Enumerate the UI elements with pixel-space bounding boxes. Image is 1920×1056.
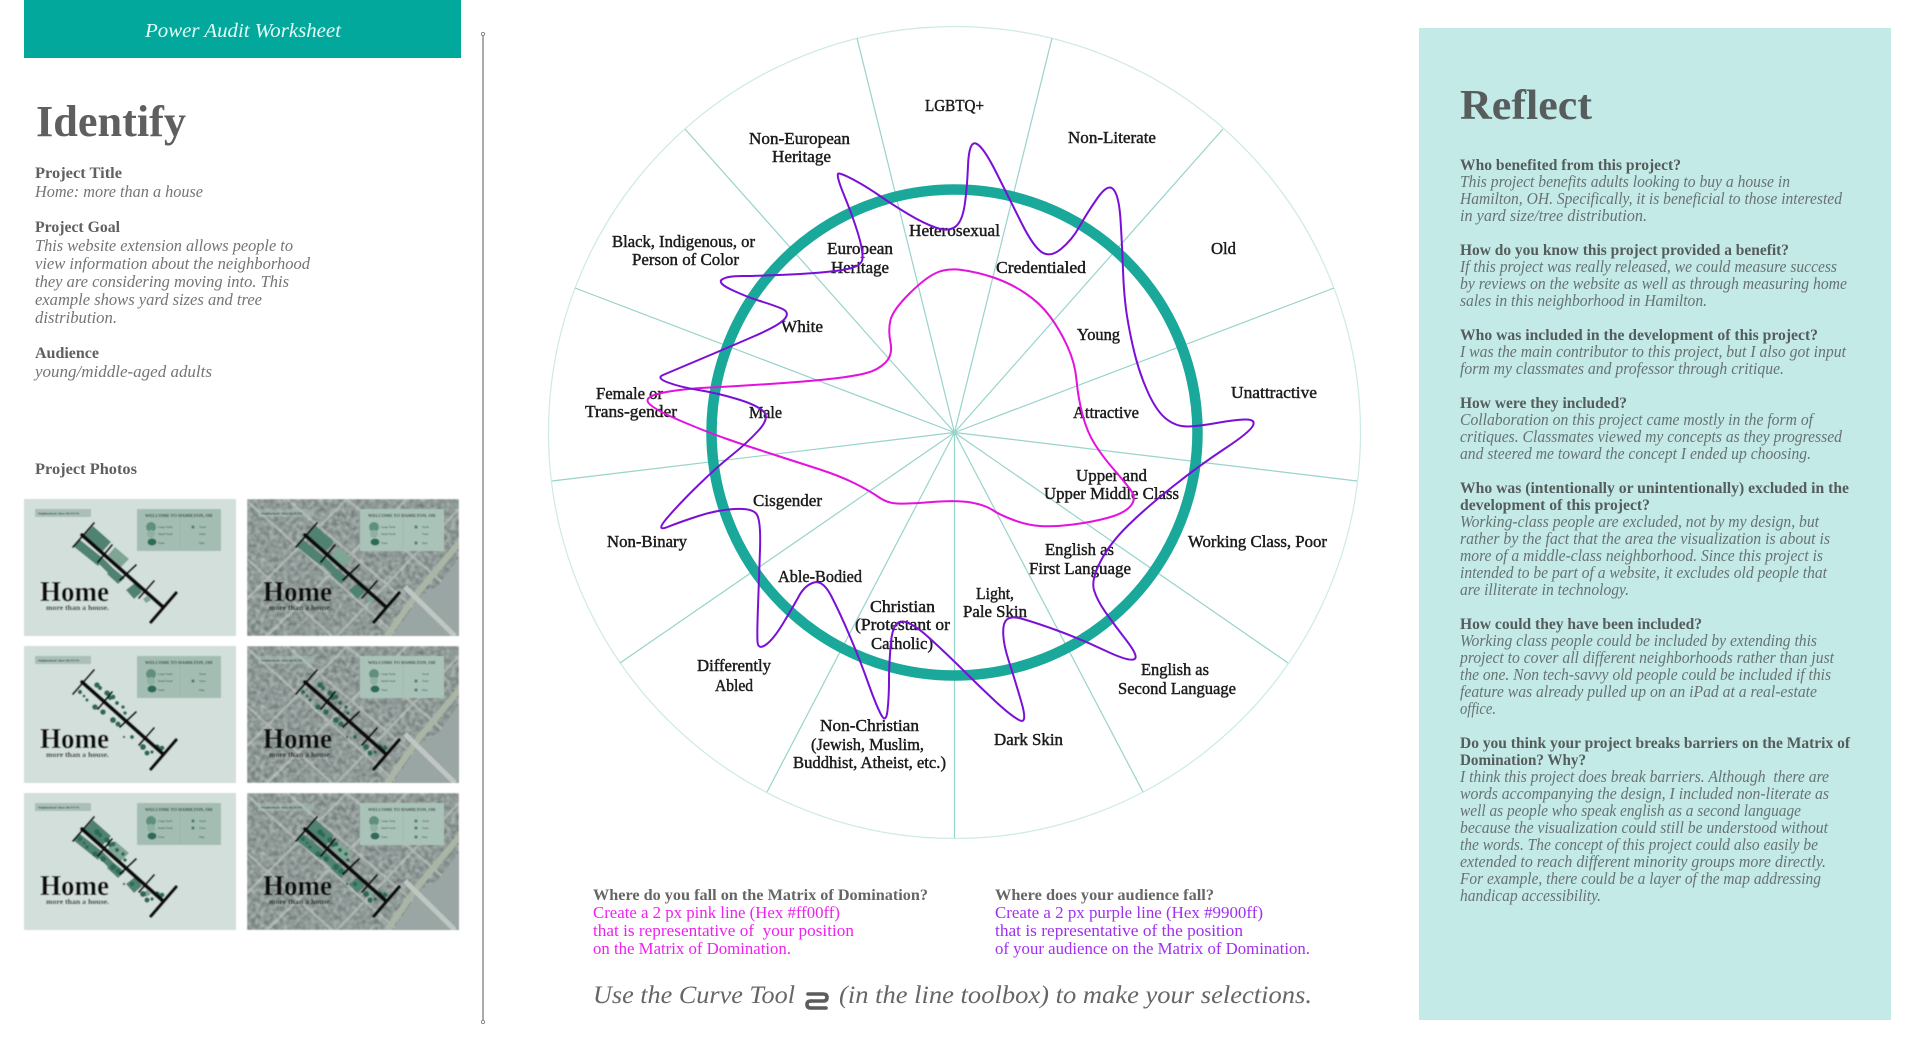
photo: yards and trees on aerial: Small Yards [381,826,396,830]
curve tool instruction [593,982,1312,1009]
photo: yards on aerial: Home [263,577,332,608]
vertical divider [481,32,485,1024]
photo: yards and trees on plain background: Neighborhood: Show Me H F Pt [38,806,79,810]
question: breaks barriers: because the visualization could still be understood without [1460,818,1828,837]
photo: yards on aerial: more than a house. [269,603,332,612]
curve: purple audience position [660,143,1254,721]
question: who was included [1459,327,1846,378]
photo: yards and trees on aerial: Neighborhood: Show Me H F Pt [261,806,302,810]
inner labels: Heritage [831,258,889,277]
photo: yards on aerial: Map [422,541,428,545]
question: who benefited: Who benefited from this project? [1460,157,1681,174]
photo: yards on plain background: Trees [158,541,165,545]
photo: trees on aerial: Yards [422,672,430,676]
question: who was excluded: Who was (intentionally or unintentionally) excluded in the [1460,480,1849,497]
photo: yards on plain background: Map [199,541,205,545]
question: how do you know: sales in this neighborhood in Hamilton. [1460,291,1707,310]
outer labels: Non-Binary [607,532,687,551]
inner labels: Heterosexual [909,221,1000,240]
photo: yards and trees on plain background: Trees [158,835,165,839]
photo: yards on aerial: Trees [381,541,388,545]
power threshold ring [712,190,1198,676]
header band: Power Audit Worksheet [144,20,341,42]
inner labels: Male [749,403,782,422]
photo: trees on plain background: Neighborhood: Show Me H F Pt [38,658,79,662]
question: breaks barriers: Domination? Why? [1460,752,1586,769]
question: how do you know: by reviews on the website as well as through measuring home [1460,274,1847,293]
photo: trees on plain background: Large Yards [158,672,173,676]
text block: project goal: view information about the neighborhood [35,254,311,273]
photo: yards on aerial: Neighborhood: Show Me H F Pt [261,512,302,516]
outer labels: Trans-gender [585,402,677,421]
text block: project goal [35,219,311,327]
curve tool instruction: (in the line toolbox) to make your selections. [839,982,1312,1009]
photo: yards and trees on aerial: WELCOME TO HAMILTON, OH [368,807,436,812]
photo: yards on plain background: Large Yards [158,525,173,529]
outer labels: Black, Indigenous, or [612,232,755,251]
inner labels: Young [1077,325,1120,344]
text block: audience [33,345,212,381]
text block: audience: young/middle-aged adults [33,362,212,381]
question: how could they have been included [1459,616,1834,718]
question: how could they have been included: Working class people could be included by extending this [1460,631,1817,650]
outer labels: Heritage [772,147,831,166]
outer labels: LGBTQ+ [925,96,984,115]
question: who was excluded: are illiterate in technology. [1460,580,1629,599]
instruction: purple line: of your audience on the Matrix of Domination. [995,939,1310,958]
photo: yards on aerial: Trees [422,532,429,536]
instruction: pink line [593,887,928,958]
inner labels: Light, [976,584,1014,603]
photo: yards and trees on plain background: more than a house. [46,897,109,906]
heading: Reflect: Reflect [1460,83,1592,129]
inner labels: First Language [1029,559,1131,578]
photo: yards and trees on aerial [247,793,459,930]
photo: yards on plain background [24,499,236,636]
inner labels: Christian [870,597,936,616]
inner labels: Upper Middle Class [1044,484,1179,503]
outer labels: Unattractive [1231,383,1317,402]
photo: yards and trees on aerial: Yards [422,819,430,823]
question: breaks barriers: handicap accessibility. [1460,886,1601,905]
text block: audience: Audience [35,345,99,362]
question: who was excluded: intended to be part of a website, it excludes old people that [1460,563,1827,582]
question: how do you know: How do you know this project provided a benefit? [1460,242,1789,259]
question: who was excluded: Working-class people are excluded, not by my design, but [1460,512,1819,531]
panel: reflect [1419,28,1891,1020]
outer labels: Working Class, Poor [1188,532,1327,551]
photo: trees on plain background: Small Yards [158,679,173,683]
question: who was excluded: development of this project? [1460,497,1650,514]
inner labels: (Protestant or [855,615,950,634]
question: how do you know: If this project was really released, we could measure success [1459,257,1837,276]
icon: curve tool [807,994,827,1008]
outer labels: Buddhist, Atheist, etc.) [793,753,946,772]
instruction: purple line [995,887,1310,958]
text block: project goal: Project Goal [35,219,121,236]
outer labels [585,96,1327,772]
question: how could they have been included: How could they have been included? [1460,616,1702,633]
photo: trees on aerial: Trees [422,679,429,683]
question: breaks barriers [1459,735,1851,905]
instruction: purple line: Create a 2 px purple line (Hex #9900ff) [995,903,1263,922]
question: who benefited: Hamilton, OH. Specifically, it is beneficial to those interested [1459,189,1843,208]
inner labels: Attractive [1073,403,1139,422]
photo: yards on aerial: Yards [422,525,430,529]
question: breaks barriers: Do you think your project breaks barriers on the Matrix of [1460,735,1851,752]
question: breaks barriers: the words. The concept of this project could also easily be [1460,835,1818,854]
photo: yards on plain background: Yards [199,525,207,529]
outer labels: (Jewish, Muslim, [811,735,924,754]
inner labels: White [781,317,823,336]
text block: project title [34,165,203,201]
question: how could they have been included: the one. Non tech-savvy old people could be included if this [1460,665,1831,684]
question: who was excluded: rather by the fact that the area the visualization is about is [1460,529,1830,548]
text block: project title: Home: more than a house [34,182,203,201]
photo: trees on aerial: more than a house. [269,750,332,759]
question: how were they included [1460,395,1843,463]
photo: yards and trees on plain background: Home [40,871,109,902]
photo: trees on aerial: Trees [381,688,388,692]
instruction: purple line: that is representative of the position [995,921,1243,940]
inner labels: Able-Bodied [778,567,862,586]
inner labels: European [827,239,894,258]
photo: trees on plain background: WELCOME TO HAMILTON, OH [145,660,213,665]
photo: trees on plain background: Trees [199,679,206,683]
photo: trees on plain background: Trees [158,688,165,692]
question: who was included: form my classmates and professor through critique. [1460,359,1784,378]
photo: trees on plain background: Map [199,688,205,692]
photo: yards on plain background: Small Yards [158,532,173,536]
question: how could they have been included: feature was already pulled up on an iPad at a real-estate [1460,682,1817,701]
photo: yards and trees on plain background: WELCOME TO HAMILTON, OH [145,807,213,812]
header band [24,0,461,58]
outer labels: Non-Christian [820,716,919,735]
text block: project goal: they are considering moving into. This [35,272,289,291]
inner labels: Credentialed [996,258,1087,277]
chart: matrix of domination wheel [548,26,1360,838]
photo: trees on aerial: Small Yards [381,679,396,683]
photo: trees on plain background: Home [40,724,109,755]
photo: yards and trees on plain background [24,793,236,930]
text block: project goal: example shows yard sizes and tree [35,290,262,309]
question: who was included: Who was included in the development of this project? [1460,327,1818,344]
question: breaks barriers: extended to reach different minority groups more directly. [1460,852,1826,871]
outer labels: Female or [596,384,663,403]
instruction: pink line: Create a 2 px pink line (Hex #ff00ff) [593,903,840,922]
curve: pink designer position [648,269,1134,526]
outer labels: Differently [697,656,771,675]
question: who benefited: in yard size/tree distribution. [1460,206,1647,225]
question: who benefited: This project benefits adults looking to buy a house in [1460,172,1790,191]
photo: yards on aerial: Small Yards [381,532,396,536]
question: breaks barriers: words accompanying the design, I included non-literate as [1460,784,1829,803]
question: how do you know [1459,242,1847,310]
photo: yards on plain background: WELCOME TO HAMILTON, OH [145,513,213,518]
text block: project goal: distribution. [35,308,117,327]
photo: trees on aerial: Neighborhood: Show Me H F Pt [261,658,302,662]
outer labels: English as [1141,660,1209,679]
outer labels: Non-Literate [1068,128,1156,147]
photo: trees on aerial: Large Yards [381,672,396,676]
outer circle and spokes [548,26,1360,838]
instruction: purple line: Where does your audience fall? [995,887,1214,904]
question: who was excluded [1460,480,1849,599]
question: how were they included: Collaboration on this project came mostly in the form of [1460,410,1815,429]
photo: yards and trees on plain background: Yards [199,819,207,823]
outer labels: Dark Skin [994,730,1063,749]
photo: yards and trees on aerial: Trees [381,835,388,839]
photo: trees on plain background: Yards [199,672,207,676]
photo: trees on plain background [24,646,236,783]
inner labels: Catholic) [871,634,933,653]
photo: yards on plain background: Neighborhood: Show Me H F Pt [38,512,79,516]
photo: trees on aerial: Home [263,724,332,755]
photo: yards and trees on aerial: more than a house. [269,897,332,906]
photo: yards and trees on aerial: Large Yards [381,819,396,823]
inner labels: Pale Skin [963,602,1027,621]
inner labels: English as [1045,540,1114,559]
question: who was included: I was the main contributor to this project, but I also got input [1459,342,1846,361]
instruction: pink line: Where do you fall on the Matrix of Domination? [593,887,928,904]
photo: yards on plain background: more than a house. [46,603,109,612]
photo: yards and trees on aerial: Map [422,835,428,839]
photo: trees on plain background: more than a house. [46,750,109,759]
photo: yards and trees on plain background: Large Yards [158,819,173,823]
question: who was excluded: more of a middle-class neighborhood. Since this project is [1460,546,1823,565]
question: breaks barriers: For example, there could be a layer of the map addressing [1459,869,1821,888]
photo: yards and trees on plain background: Map [199,835,205,839]
photo: trees on aerial [247,646,459,783]
photo: yards on plain background: Trees [199,532,206,536]
question: how were they included: critiques. Classmates viewed my concepts as they progressed [1460,427,1843,446]
photo: yards on plain background: Home [40,577,109,608]
question: how were they included: and steered me toward the concept I ended up choosing. [1460,444,1811,463]
inner labels [749,221,1179,653]
outer labels: Old [1211,239,1236,258]
heading: Identify: Identify [36,97,186,146]
curve tool instruction: Use the Curve Tool [593,982,795,1009]
photo: yards and trees on plain background: Trees [199,826,206,830]
heading: project photos: Project Photos [35,461,137,478]
question: breaks barriers: well as people who speak english as a second language [1460,801,1801,820]
question: how could they have been included: office. [1460,699,1496,718]
inner labels: Upper and [1076,466,1147,485]
photo: yards on aerial [247,499,459,636]
outer labels: Non-European [749,129,851,148]
question: breaks barriers: I think this project does break barriers. Although there are [1459,767,1829,786]
photo: yards and trees on plain background: Small Yards [158,826,173,830]
question: who benefited [1459,157,1843,225]
text block: project goal: This website extension allows people to [35,236,293,255]
photo: trees on aerial: Map [422,688,428,692]
photo: yards on aerial: WELCOME TO HAMILTON, OH [368,513,436,518]
instruction: pink line: on the Matrix of Domination. [593,939,791,958]
outer labels: Person of Color [632,250,739,269]
text block: project title: Project Title [35,165,122,182]
photo: yards on aerial: Large Yards [381,525,396,529]
inner labels: Cisgender [753,491,822,510]
instruction: pink line: that is representative of your position [593,921,854,940]
photo: yards and trees on aerial: Home [263,871,332,902]
photo: yards and trees on aerial: Trees [422,826,429,830]
question: how could they have been included: project to cover all different neighborhoods rather than just [1459,648,1834,667]
outer labels: Abled [715,676,753,695]
photo: trees on aerial: WELCOME TO HAMILTON, OH [368,660,436,665]
question: how were they included: How were they included? [1460,395,1627,412]
outer labels: Second Language [1118,679,1236,698]
